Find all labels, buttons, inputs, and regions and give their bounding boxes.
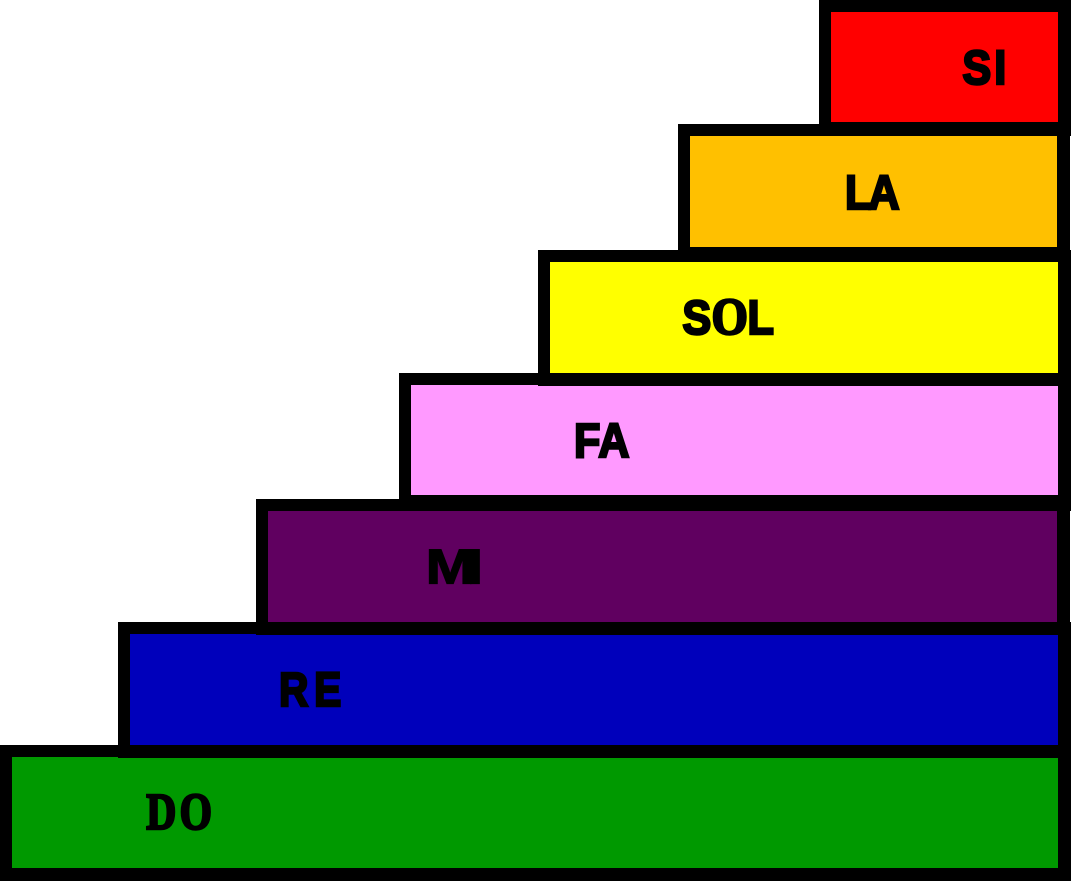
step: LA	[678, 124, 1070, 262]
step: SI	[819, 0, 1071, 136]
step: SI: I	[994, 41, 1006, 94]
step: SOL	[538, 250, 1071, 386]
step: RE: E	[314, 664, 341, 717]
step: DO: D	[146, 783, 176, 841]
step: DO	[0, 745, 1071, 881]
step: FA: F	[574, 414, 600, 467]
step: RE: R	[279, 664, 308, 717]
step: MI: M	[426, 540, 475, 594]
step: MI	[256, 499, 1070, 635]
step: SI: S	[962, 41, 991, 94]
step: MI: I	[467, 540, 483, 594]
step: FA	[399, 373, 1071, 511]
step: RE	[118, 622, 1071, 758]
step: DO: O	[180, 783, 212, 841]
step: LA: A	[868, 166, 900, 219]
step: SOL: S	[682, 291, 711, 344]
step: SOL: O	[712, 287, 748, 345]
step: LA: L	[845, 166, 871, 219]
step: SOL: L	[748, 291, 774, 344]
step: FA: A	[598, 414, 630, 467]
